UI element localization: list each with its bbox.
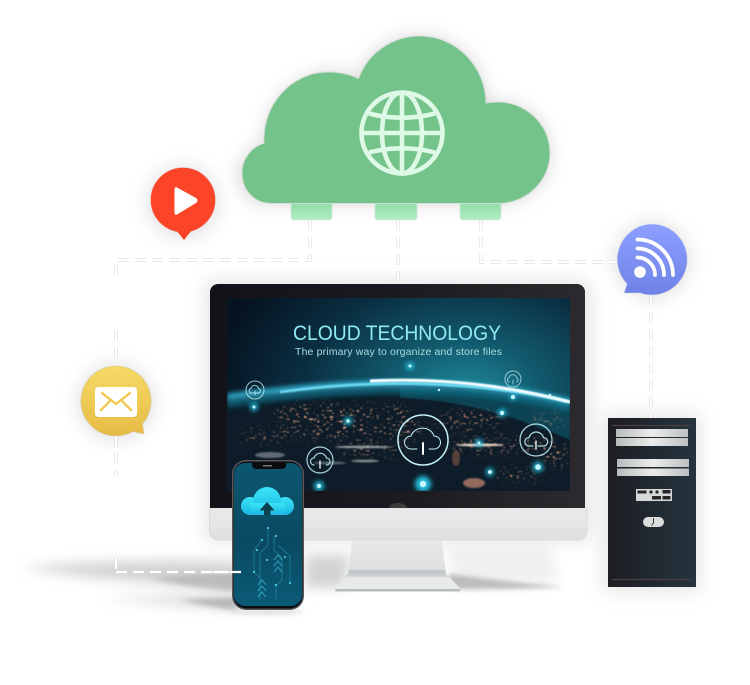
ports panel	[636, 489, 672, 501]
icon: rss bubble	[617, 224, 687, 295]
computer tower	[608, 418, 696, 587]
phone screen	[234, 463, 302, 606]
monitor bezel	[210, 284, 585, 508]
monitor chin	[210, 508, 587, 540]
screen heading: CLOUD TECHNOLOGY	[293, 321, 501, 345]
circuit traces	[254, 527, 290, 600]
phone notch	[252, 463, 286, 469]
connector ports	[291, 203, 501, 220]
monitor stand	[335, 540, 460, 592]
horizon glow	[227, 384, 570, 402]
cloud upload nodes	[246, 371, 552, 473]
glowing nodes	[250, 362, 543, 492]
phone	[213, 460, 304, 610]
earth	[227, 384, 570, 491]
cloud with globe	[242, 36, 550, 220]
icon: mail bubble	[81, 366, 151, 436]
dashed connector lines	[116, 220, 651, 572]
phone cloud upload icon	[241, 487, 294, 515]
background shadows	[20, 36, 700, 615]
icon: video play bubble	[150, 168, 216, 240]
connector end dashes	[213, 571, 241, 573]
city lights	[239, 405, 569, 481]
icon: globe	[362, 92, 442, 174]
monitor screen	[227, 298, 570, 492]
screen subheading: The primary way to organize and store files	[295, 346, 502, 358]
drive bays	[616, 429, 689, 476]
monitor	[210, 284, 587, 592]
power button	[643, 517, 664, 527]
cloud body	[242, 36, 550, 204]
